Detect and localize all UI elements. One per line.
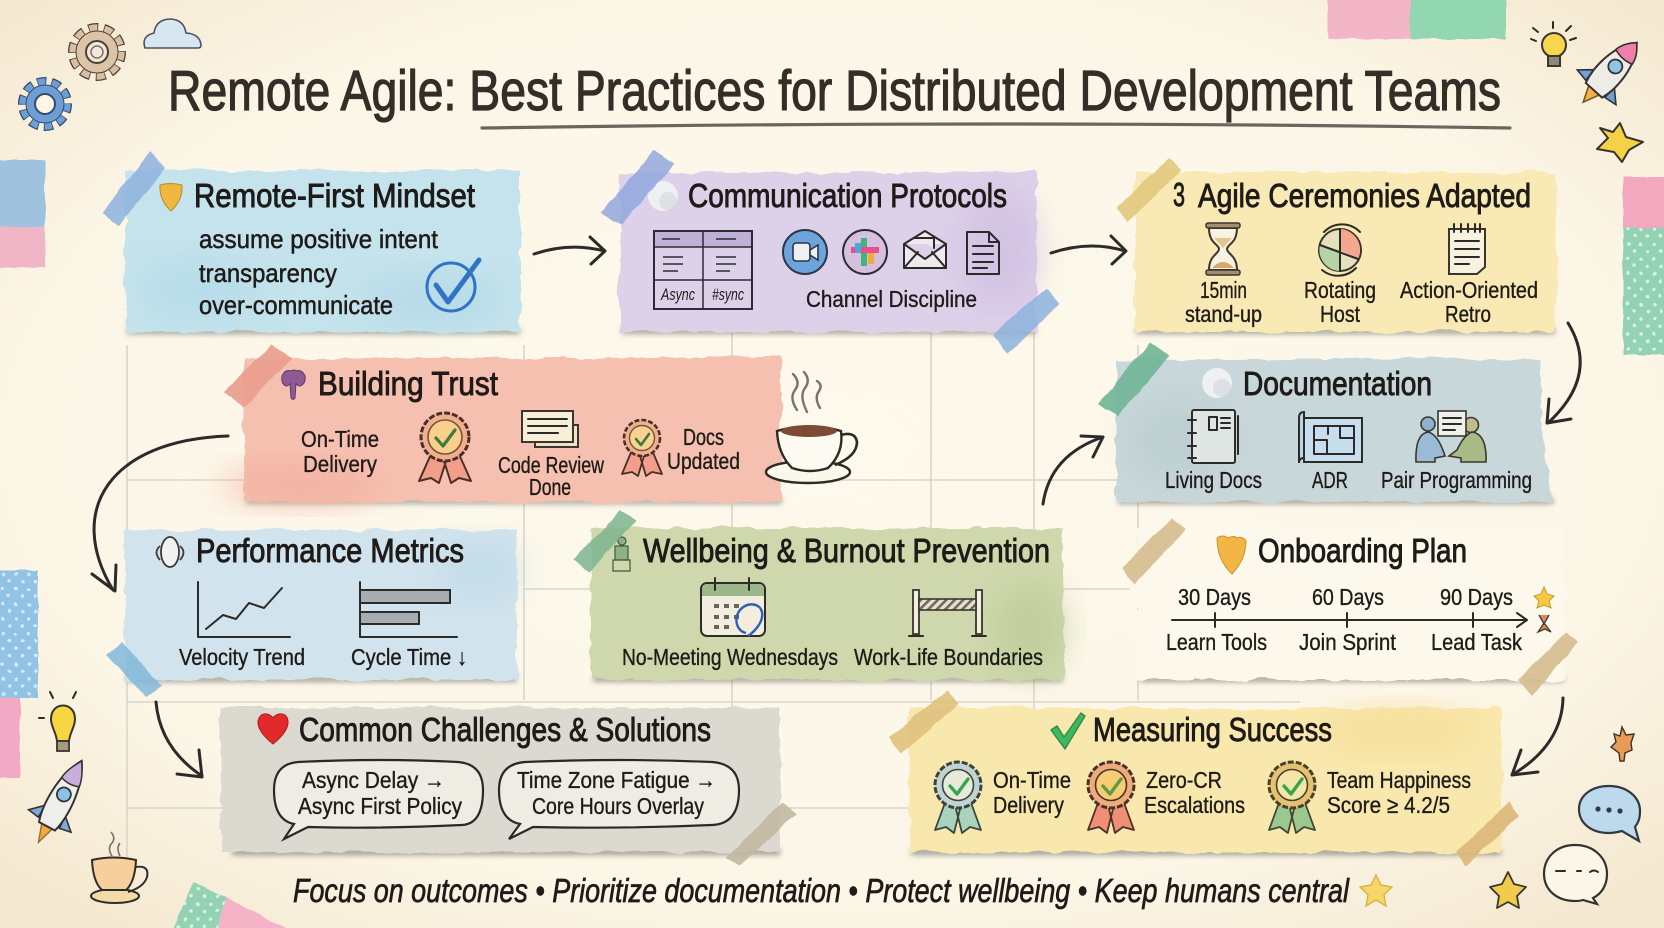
label: 60 days: 60 Days: [1312, 584, 1384, 610]
label: docs updated: [667, 424, 740, 474]
icon: light bulb top right: [1531, 22, 1576, 66]
label: on-time delivery: On-Time: [301, 426, 379, 452]
label: cycle time: Cycle Time ↓: [351, 644, 467, 670]
icon: white sphere: [1202, 368, 1232, 398]
tape: metrics: [106, 642, 162, 698]
icon: number three: 3: [1173, 176, 1185, 213]
icon: bottom right star: [1490, 872, 1526, 908]
label: zero-cr escalations: Escalations: [1144, 792, 1245, 818]
label: zero-cr escalations: Zero-CR: [1146, 767, 1222, 793]
label: no-meeting wednesdays: No-Meeting Wednesdays: [622, 644, 838, 670]
heading: remote-first mindset: Remote-First Mindset: [194, 177, 475, 214]
icon: hourglass: [1206, 223, 1240, 275]
arrow: wellbeing to documentation: [1043, 436, 1103, 504]
label: learn tools: Learn Tools: [1166, 629, 1267, 655]
icon: code review papers: [522, 411, 578, 447]
panel: measuring success: [909, 708, 1501, 855]
icon: video call: [783, 230, 827, 274]
icon: white sphere: [648, 181, 678, 211]
chart: velocity trend: [198, 582, 290, 637]
icon: purple mushroom: [282, 370, 305, 400]
heading: documentation: Documentation: [1243, 365, 1432, 402]
washi tape: bottom green and pink: [172, 882, 294, 928]
icon: gold medal: [1269, 762, 1315, 833]
icon: outlined speech bubble: [1544, 845, 1607, 904]
tape: communication top: [601, 150, 674, 225]
washi tape: top right pink and green: [1328, 0, 1506, 39]
icon: document: [967, 232, 999, 274]
panel: onboarding plan: [1136, 528, 1564, 682]
label: code review done: [498, 452, 604, 500]
icon: headset: [156, 537, 184, 567]
label: on-time delivery: Delivery: [993, 792, 1064, 818]
label: team happiness score: Score ≥ 4.2/5: [1327, 792, 1450, 818]
footer takeaway line: Focus on outcomes • Prioritize documentation • Protect wellbeing • Keep humans central: [293, 872, 1350, 909]
label: 30 days: 30 Days: [1178, 584, 1251, 610]
panel: communication protocols: [620, 172, 1040, 334]
tape: measuring bottom: [1456, 802, 1520, 866]
text: over-communicate: over-communicate: [199, 290, 393, 320]
washi tape: left edge blue and pink: [0, 160, 45, 268]
table: async and sync: [654, 231, 752, 309]
tape: challenges: [726, 802, 796, 866]
icon: chat app: [843, 230, 887, 274]
panel: building trust: [220, 358, 782, 505]
label: on-time delivery: [301, 426, 379, 477]
tape: communication bottom: [993, 288, 1060, 354]
tape: ceremonies: [1116, 158, 1182, 222]
speech bubble: async delay: Async Delay →: [302, 767, 445, 793]
icon: red heart: [258, 714, 288, 744]
label: 15min stand-up: [1185, 277, 1262, 327]
tape: onboarding bottom: [1518, 632, 1578, 696]
table: async and sync: #sync: [712, 285, 744, 304]
icon: blue-green medal: [935, 762, 981, 833]
panel: remote-first mindset: [125, 170, 520, 334]
arrow: communication to ceremonies: [1051, 236, 1126, 264]
label: team happiness score: Team Happiness: [1327, 767, 1471, 793]
icon: blue check circle: [427, 260, 479, 311]
icon: green check: [1051, 713, 1085, 749]
icon: flame bulb: [1611, 727, 1634, 761]
chart: cycle time bars: [360, 582, 457, 637]
icon: tan gear: [75, 30, 119, 74]
tape: measuring top: [888, 690, 958, 754]
icon: rotating host: [1319, 224, 1361, 276]
tape: documentation: [1098, 342, 1170, 416]
label: docs updated: Updated: [667, 448, 740, 474]
icon: small flag: [1538, 615, 1551, 632]
label: 90 days: 90 Days: [1440, 584, 1513, 610]
icon: left rocket: [17, 750, 103, 853]
arrow: trust to metrics: [92, 436, 228, 591]
speech bubble: async delay: [274, 760, 483, 839]
text: transparency: transparency: [199, 258, 337, 288]
icon: gold star: [1534, 587, 1554, 608]
label: on-time delivery: [993, 767, 1071, 818]
tape: remote-first: [102, 152, 166, 226]
label: code review done: Code Review: [498, 452, 604, 478]
icon: cloud: [144, 19, 201, 48]
label: join sprint: Join Sprint: [1299, 629, 1397, 655]
label: docs updated: Docs: [683, 424, 724, 450]
panel: documentation: [1116, 358, 1553, 504]
icon: orange medal: [419, 413, 471, 483]
icon: small medal: [622, 420, 662, 476]
icon: meditating figure: [613, 537, 630, 571]
icon: star top right: [1597, 123, 1643, 162]
timeline arrow: [1172, 613, 1527, 627]
icon: footer star: [1360, 875, 1392, 906]
heading: building trust: Building Trust: [318, 365, 498, 402]
label: 15min stand-up: 15min: [1200, 277, 1247, 303]
heading: performance metrics: Performance Metrics: [196, 532, 464, 569]
icon: calendar: [701, 578, 765, 636]
heading: common challenges and solutions: Common Challenges & Solutions: [299, 711, 711, 748]
icon: envelope: [904, 231, 946, 268]
arrow: ceremonies to documentation: [1547, 323, 1580, 423]
icon: tea cup: [91, 832, 147, 903]
label: adr: ADR: [1312, 467, 1348, 493]
label: velocity trend: Velocity Trend: [179, 644, 305, 670]
label: rotating host: [1304, 277, 1376, 327]
icon: notebook: [1188, 410, 1238, 463]
heading: wellbeing and burnout prevention: Wellbeing & Burnout Prevention: [643, 532, 1050, 569]
washi tape: right edge pink and green dotted: [1623, 177, 1664, 355]
washi tape: left edge dotted blue and pink: [0, 570, 38, 778]
label: code review done: Done: [529, 474, 571, 500]
panel: common challenges and solutions: [220, 708, 780, 855]
label: rotating host: Rotating: [1304, 277, 1376, 303]
panel: agile ceremonies adapted: [1134, 172, 1556, 334]
icon: pair programming: [1416, 411, 1486, 462]
heading: communication protocols: Communication Protocols: [688, 177, 1007, 214]
label: team happiness score: [1327, 767, 1471, 818]
icon: left light bulb: [39, 692, 76, 751]
label: rotating host: Host: [1320, 301, 1361, 327]
icon: blue speech bubble: [1579, 786, 1640, 841]
tape: onboarding top: [1122, 518, 1186, 584]
label: living docs: Living Docs: [1165, 467, 1262, 493]
icon: boundary barrier: [909, 590, 986, 636]
icon: blue gear: [25, 84, 65, 124]
panel: performance metrics: [125, 530, 520, 682]
label: action-oriented retro: Retro: [1445, 301, 1491, 327]
panel: wellbeing and burnout prevention: [591, 528, 1065, 682]
speech bubble: time zone fatigue: [499, 760, 739, 839]
text: channel discipline: Channel Discipline: [806, 286, 977, 312]
tape: trust: [224, 344, 292, 408]
icon: rocket top right: [1564, 25, 1656, 120]
icon: blueprint: [1299, 412, 1362, 463]
label: pair programming: Pair Programming: [1381, 467, 1532, 493]
text: assume positive intent: assume positive intent: [199, 224, 439, 254]
heading: agile ceremonies adapted: Agile Ceremonies Adapted: [1198, 177, 1531, 214]
arrow: mindset to communication: [534, 237, 605, 264]
label: work-life boundaries: Work-Life Boundaries: [854, 644, 1043, 670]
icon: retro notepad: [1449, 224, 1485, 274]
label: lead task: Lead Task: [1431, 629, 1522, 655]
speech bubble: time zone fatigue: Core Hours Overlay: [532, 793, 704, 819]
icon: orange medal: [1088, 762, 1134, 833]
label: action-oriented retro: Action-Oriented: [1400, 277, 1538, 303]
icon: coffee cup: [766, 372, 857, 483]
icon: gold shield: [1217, 536, 1246, 574]
icon: gold shield: [160, 184, 182, 211]
label: on-time delivery: Delivery: [303, 451, 377, 477]
label: 15min stand-up: stand-up: [1185, 301, 1262, 327]
heading: onboarding plan: Onboarding Plan: [1258, 532, 1467, 569]
tape: wellbeing: [574, 510, 636, 572]
arrow: metrics to challenges: [156, 702, 202, 777]
table: async and sync: Async: [660, 285, 695, 304]
speech bubble: time zone fatigue: Time Zone Fatigue →: [517, 767, 716, 793]
heading: measuring success: Measuring Success: [1093, 711, 1332, 748]
label: action-oriented retro: [1400, 277, 1538, 327]
arrow: onboarding to success: [1512, 698, 1563, 775]
label: on-time delivery: On-Time: [993, 767, 1071, 793]
speech bubble: async delay: Async First Policy: [298, 793, 462, 819]
label: zero-cr escalations: [1144, 767, 1245, 818]
